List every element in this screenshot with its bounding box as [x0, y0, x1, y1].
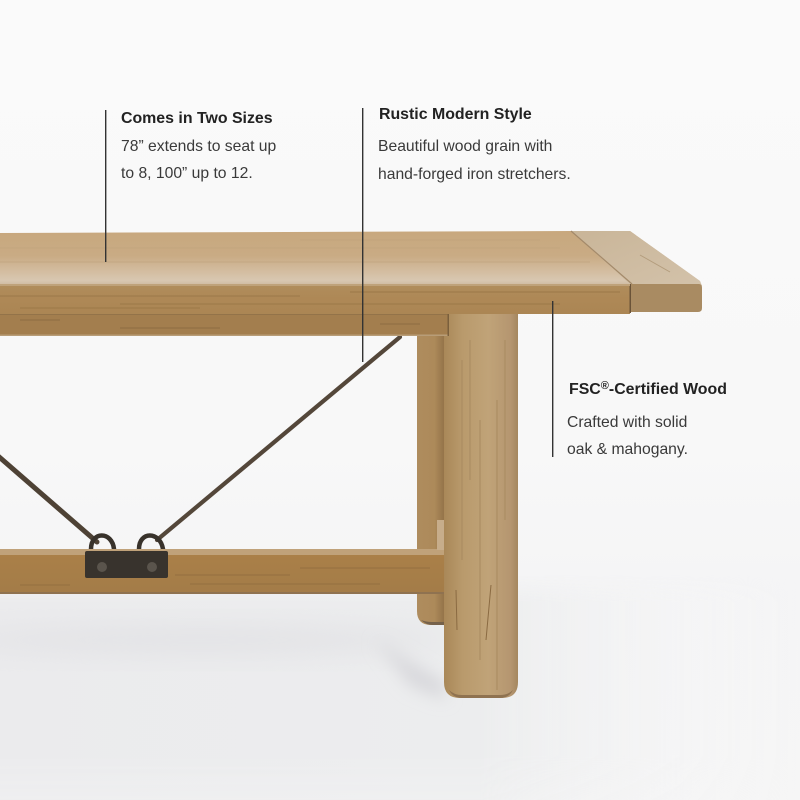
- callout: Rustic Modern Style: hand-forged iron stretchers.: [378, 166, 571, 183]
- callout: FSC-Certified Wood: Crafted with solid: [567, 414, 687, 431]
- callout: Comes in Two Sizes: Comes in Two Sizes: [121, 110, 273, 127]
- callout: FSC-Certified Wood: FSC: [569, 381, 601, 398]
- table illustration: [0, 231, 702, 698]
- tabletop surface: [0, 231, 702, 286]
- apron: [0, 314, 449, 336]
- callout: Rustic Modern Style: Beautiful wood grain with: [378, 138, 552, 155]
- callout: Comes in Two Sizes: [105, 110, 277, 262]
- callout: Comes in Two Sizes: 78” extends to seat up: [121, 138, 277, 155]
- callout: FSC-Certified Wood: ®: [601, 380, 609, 392]
- iron bracket: [85, 551, 168, 578]
- callout: FSC-Certified Wood: [552, 301, 727, 458]
- callout: FSC-Certified Wood: oak & mahogany.: [567, 441, 688, 458]
- tabletop front edge: [0, 284, 702, 314]
- back leg: [417, 330, 446, 625]
- iron stretcher rods: [0, 337, 400, 549]
- callout: Rustic Modern Style: Rustic Modern Style: [379, 106, 532, 123]
- callout: FSC-Certified Wood: -Certified Wood: [609, 381, 727, 398]
- front leg: [437, 314, 518, 698]
- lower stretcher: [0, 549, 444, 594]
- callout: Rustic Modern Style: [362, 106, 571, 362]
- floor shadows: [0, 596, 518, 789]
- callout: Comes in Two Sizes: to 8, 100” up to 12.: [121, 165, 253, 182]
